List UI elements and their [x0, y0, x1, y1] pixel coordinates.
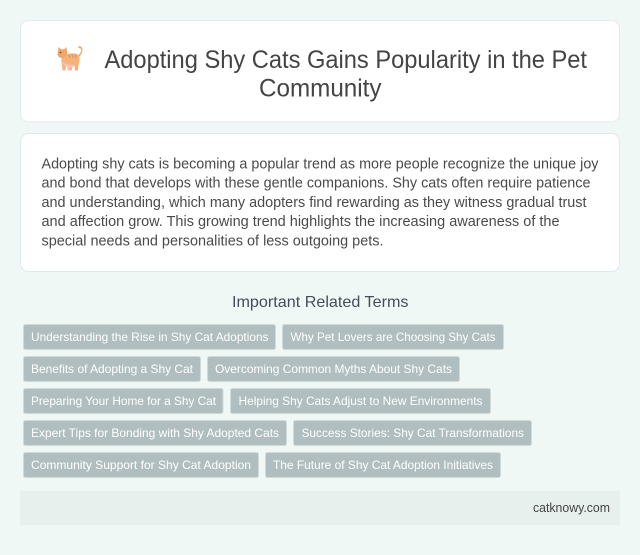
- tag: [24, 452, 258, 478]
- tag: [208, 356, 460, 382]
- tag: Community Support for Shy Cat Adoption: [31, 458, 251, 472]
- heading: related terms: Important Related Terms: [232, 294, 408, 311]
- icon: cat: [57, 46, 83, 70]
- tag: Overcoming Common Myths About Shy Cats: [215, 362, 452, 376]
- tag: [294, 420, 532, 446]
- title: [104, 46, 587, 102]
- tag: [266, 452, 500, 478]
- text block: summary: and affection grow. This growing trend highlights the increasing awareness of the: [42, 214, 560, 230]
- panel: title card: [20, 20, 620, 122]
- text block: summary: special needs and personalities of less outgoing pets.: [42, 234, 384, 250]
- tag: Why Pet Lovers are Choosing Shy Cats: [290, 330, 496, 344]
- footer: [20, 491, 620, 525]
- tag group: related terms: [24, 324, 532, 478]
- tag: The Future of Shy Cat Adoption Initiatives: [273, 458, 493, 472]
- tag: [24, 324, 276, 350]
- tag: Preparing Your Home for a Shy Cat: [31, 394, 217, 408]
- tag: Benefits of Adopting a Shy Cat: [31, 362, 194, 376]
- text block: summary: and bond that develops with these gentle companions. Shy cats often require patience: [42, 176, 590, 192]
- title: Adopting Shy Cats Gains Popularity in the Pet: [104, 46, 587, 74]
- footer: catknowy.com: [533, 500, 610, 515]
- text block: summary: and understanding, which many adopters find rewarding as they witness gradual trust: [42, 195, 586, 211]
- tag: [230, 388, 490, 414]
- tag: Understanding the Rise in Shy Cat Adoptions: [31, 330, 268, 344]
- tag: Expert Tips for Bonding with Shy Adopted Cats: [31, 426, 279, 440]
- text block: summary: Adopting shy cats is becoming a popular trend as more people recognize the unique joy: [42, 156, 599, 172]
- tag: [24, 388, 223, 414]
- title: Community: [259, 74, 382, 102]
- tag: [24, 356, 200, 382]
- tag: Helping Shy Cats Adjust to New Environments: [238, 394, 482, 408]
- text block: summary: [42, 156, 599, 250]
- tag: Success Stories: Shy Cat Transformations: [302, 426, 524, 440]
- tag: [282, 324, 504, 350]
- tag: [24, 420, 286, 446]
- panel: summary card: [20, 134, 620, 272]
